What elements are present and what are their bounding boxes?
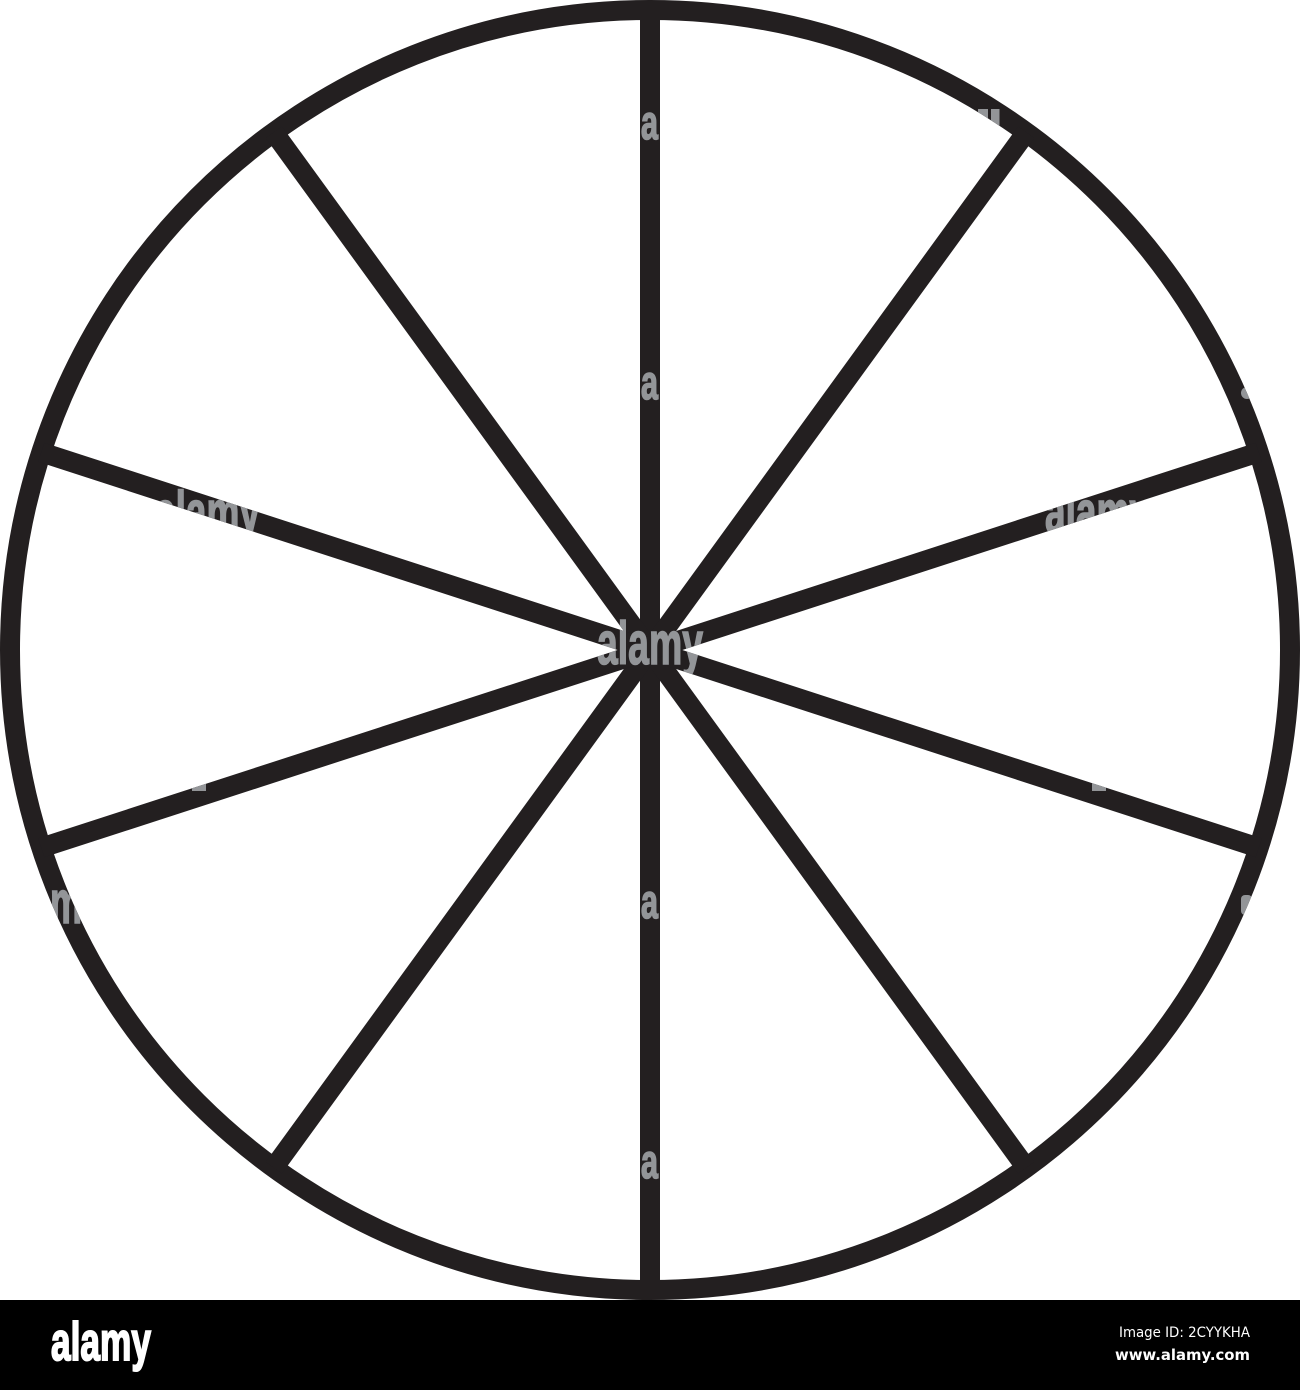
spoke: upper left to lower right (274, 132, 1026, 1168)
footer logo: alamy (51, 1312, 151, 1372)
watermark: centre: alamy (597, 610, 703, 677)
watermarks on the wheel lines (50, 97, 1253, 1189)
watermark: vertical spoke 4: a (641, 1136, 658, 1189)
watermark fragment: right rim upper (1241, 387, 1253, 399)
watermark: vertical spoke 1: a (641, 97, 658, 150)
watermark: vertical spoke 2: a (641, 357, 658, 410)
spoke: upper right to lower left (274, 132, 1026, 1168)
footer bar (0, 1300, 1300, 1390)
watermark fragment: upper right rim (978, 109, 1000, 126)
website: www.alamy.com (1115, 1346, 1250, 1364)
watermark: lower left rim: m (50, 869, 82, 936)
watermark fragment: lower right spoke (1092, 783, 1106, 791)
watermark fragment: right rim lower (1241, 895, 1252, 915)
spoke: vertical (640, 10, 660, 1290)
watermark: left spoke: alamy (155, 480, 260, 545)
spoke: left to lower right (41, 452, 1259, 848)
image id: Image ID: 2CYYKHA (1119, 1325, 1250, 1341)
watermark: right spoke: alamy (1045, 480, 1150, 545)
watermark: vertical spoke 3: a (641, 876, 658, 929)
spoke: right to lower left (41, 452, 1259, 848)
watermark fragment: lower left spoke (192, 783, 206, 791)
